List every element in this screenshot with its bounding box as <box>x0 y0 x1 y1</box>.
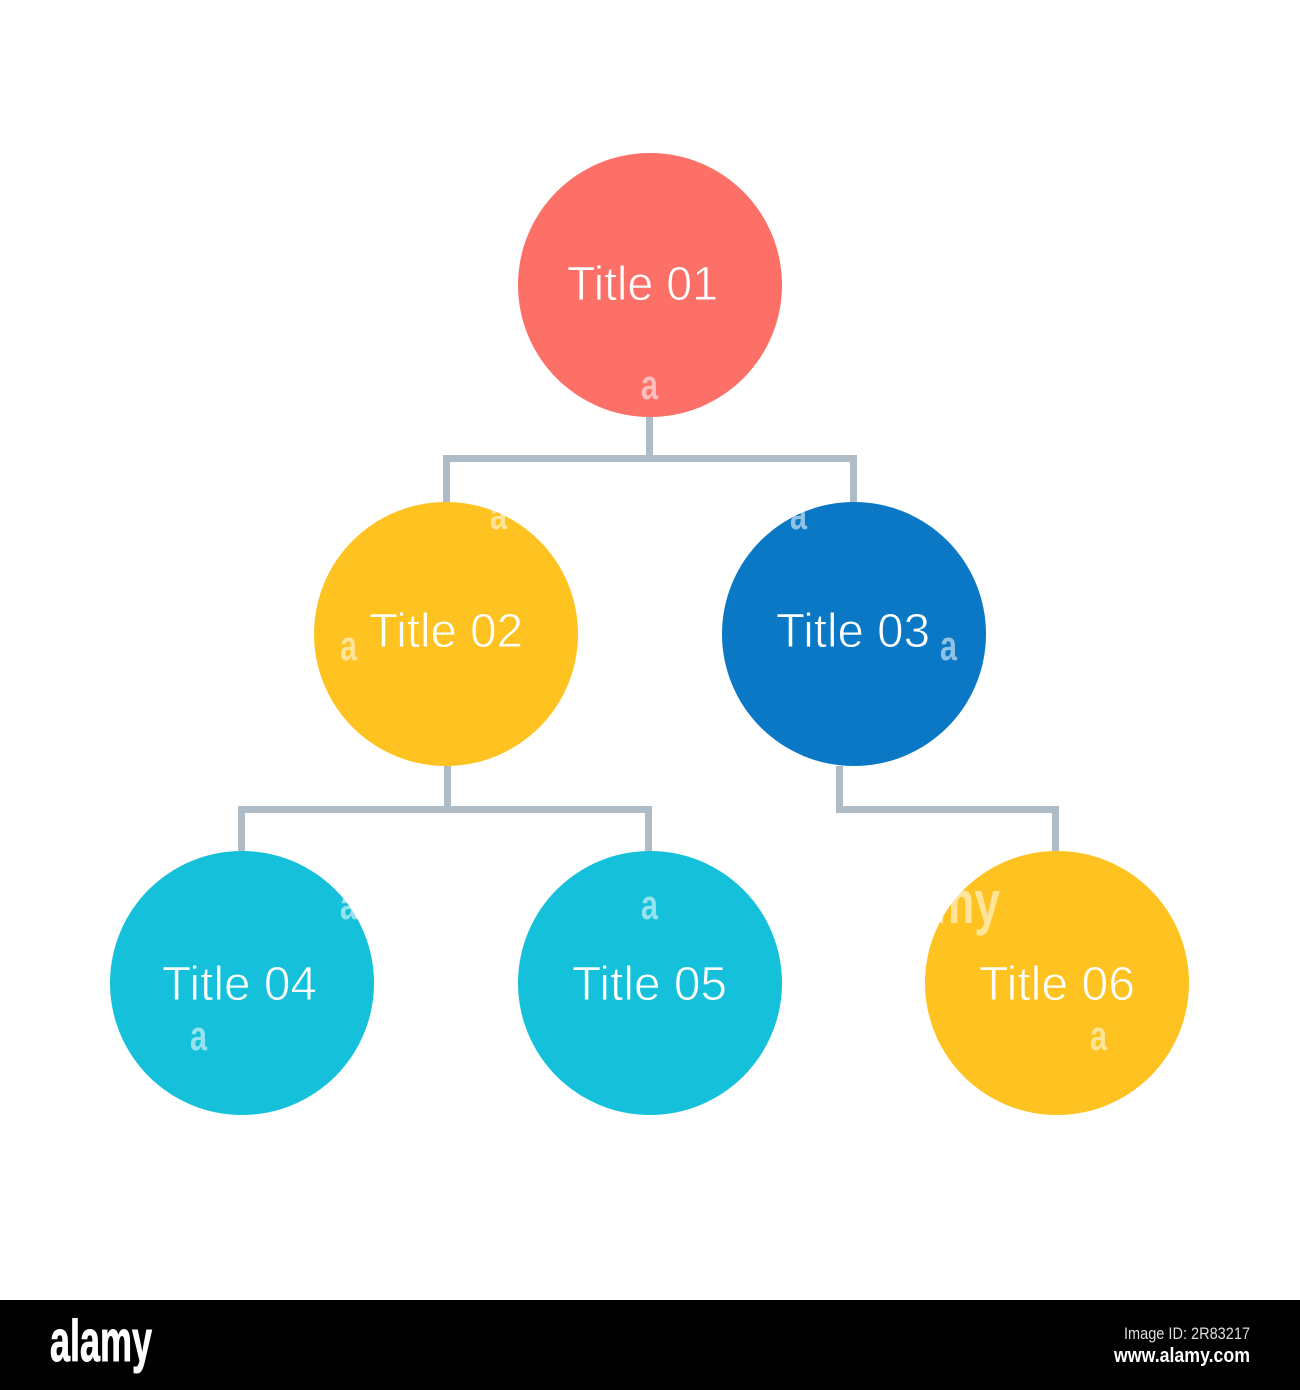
website: www.alamy.com <box>1113 1345 1250 1367</box>
node: Title 05: Title 05 <box>572 958 727 1011</box>
node: Title 02: a <box>490 491 507 538</box>
node: Title 02: a <box>340 622 357 669</box>
node: Title 05: a <box>641 881 658 928</box>
node: Title 01: a <box>641 361 658 408</box>
logo: alamy: alamy <box>50 1309 152 1374</box>
node: Title 04: Title 04 <box>162 958 317 1011</box>
footer bar <box>0 1300 1300 1390</box>
node: Title 02: Title 02 <box>369 605 523 658</box>
node: Title 03: a <box>790 491 807 538</box>
connector: Title 01 to Title 02 and Title 03 <box>446 417 854 502</box>
connector: Title 03 to Title 06 <box>840 766 1056 851</box>
node: Title 01: Title 01 <box>567 258 718 311</box>
node: Title 04 <box>110 851 374 1115</box>
connector: Title 02 to Title 04 and Title 05 <box>242 766 648 851</box>
node: Title 03: a <box>940 622 957 669</box>
node: Title 02 <box>314 491 578 766</box>
node: Title 04: a <box>190 1012 207 1059</box>
node: Title 06: Title 06 <box>979 958 1135 1011</box>
node: Title 04: a <box>340 881 357 928</box>
node: Title 06 <box>908 851 1189 1115</box>
node: Title 06: a <box>1090 1012 1107 1059</box>
node: Title 06: amy <box>908 869 1000 936</box>
node: Title 03 <box>722 491 986 766</box>
image id: Image ID: 2R83217 <box>1124 1324 1250 1343</box>
node: Title 05 <box>518 851 782 1115</box>
node: Title 03: Title 03 <box>776 605 930 658</box>
node: Title 01 <box>518 153 782 417</box>
